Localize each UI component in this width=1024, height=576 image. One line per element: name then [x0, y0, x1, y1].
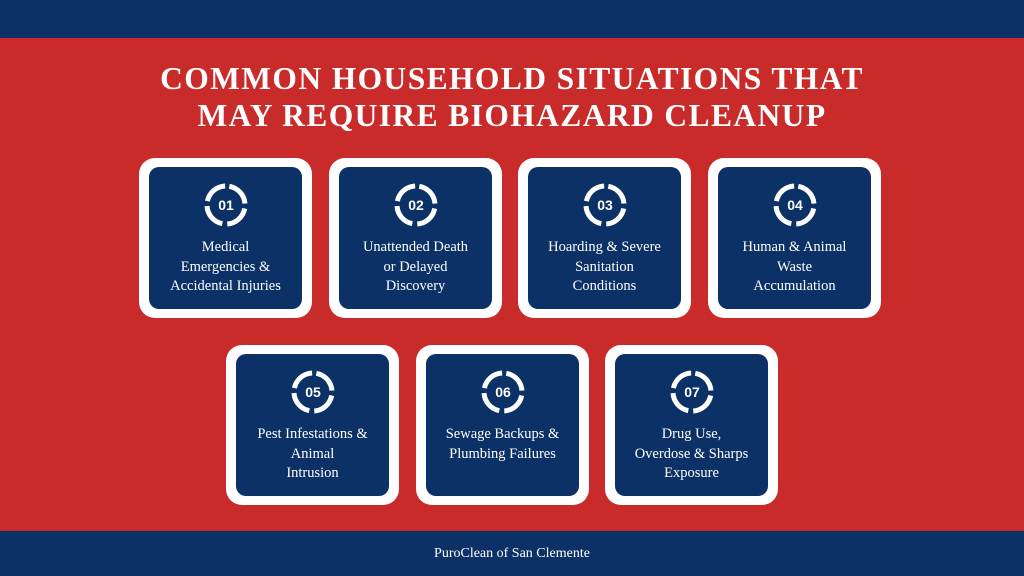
text 02 — [363, 239, 468, 294]
card 02 — [329, 158, 502, 318]
text 04: Waste — [777, 258, 812, 274]
text 03 — [548, 239, 661, 294]
text 02: Discovery — [386, 278, 445, 294]
text 04 — [742, 239, 846, 294]
icon: ring 02 — [394, 184, 438, 226]
text 01: Emergencies & — [181, 258, 270, 274]
text 02: or Delayed — [383, 258, 448, 274]
card 01 — [139, 158, 312, 318]
title — [160, 61, 864, 133]
text 04: Human & Animal — [743, 239, 846, 255]
icon: ring 07: 07 — [684, 384, 700, 400]
text 07 — [635, 426, 748, 481]
card 06 — [416, 345, 589, 505]
icon: ring 04 — [774, 184, 816, 226]
icon: ring 01 — [204, 184, 248, 226]
text 06: Sewage Backups & — [446, 426, 559, 442]
icon: ring 06: 06 — [495, 384, 511, 400]
icon: ring 02: 02 — [408, 197, 424, 213]
icon: ring 03 — [584, 184, 626, 226]
icon: ring 06 — [482, 370, 524, 414]
text 01 — [170, 239, 281, 294]
top band — [0, 0, 1024, 38]
card 04 — [708, 158, 881, 318]
bottom band — [0, 531, 1024, 576]
text 01: Accidental Injuries — [170, 278, 281, 294]
text 07: Drug Use, — [662, 426, 721, 442]
text 07: Overdose & Sharps — [635, 446, 748, 462]
text 05: Intrusion — [286, 465, 339, 481]
title: COMMON HOUSEHOLD SITUATIONS THAT — [160, 61, 864, 96]
card 07 — [605, 345, 778, 505]
icon: ring 07 — [670, 370, 714, 414]
text 02: Unattended Death — [363, 239, 468, 255]
text 05: Animal — [291, 446, 334, 462]
text 03: Conditions — [573, 278, 636, 294]
icon: ring 03: 03 — [597, 197, 613, 213]
icon: ring 05: 05 — [305, 384, 321, 400]
text 06: Plumbing Failures — [449, 446, 556, 462]
icon: ring 04: 04 — [787, 197, 803, 213]
icon: ring 01: 01 — [218, 197, 234, 213]
title: MAY REQUIRE BIOHAZARD CLEANUP — [198, 98, 826, 133]
text 01: Medical — [202, 239, 249, 255]
card 03 — [518, 158, 691, 318]
text 04: Accumulation — [753, 278, 836, 294]
text 05: Pest Infestations & — [257, 426, 368, 442]
footer text: PuroClean of San Clemente — [434, 546, 590, 561]
text 06 — [446, 426, 560, 462]
icon: ring 05 — [292, 370, 334, 414]
text 05 — [257, 426, 368, 481]
card 05 — [226, 345, 399, 505]
text 07: Exposure — [664, 465, 719, 481]
text 03: Hoarding & Severe — [548, 239, 661, 255]
text 03: Sanitation — [575, 258, 634, 274]
